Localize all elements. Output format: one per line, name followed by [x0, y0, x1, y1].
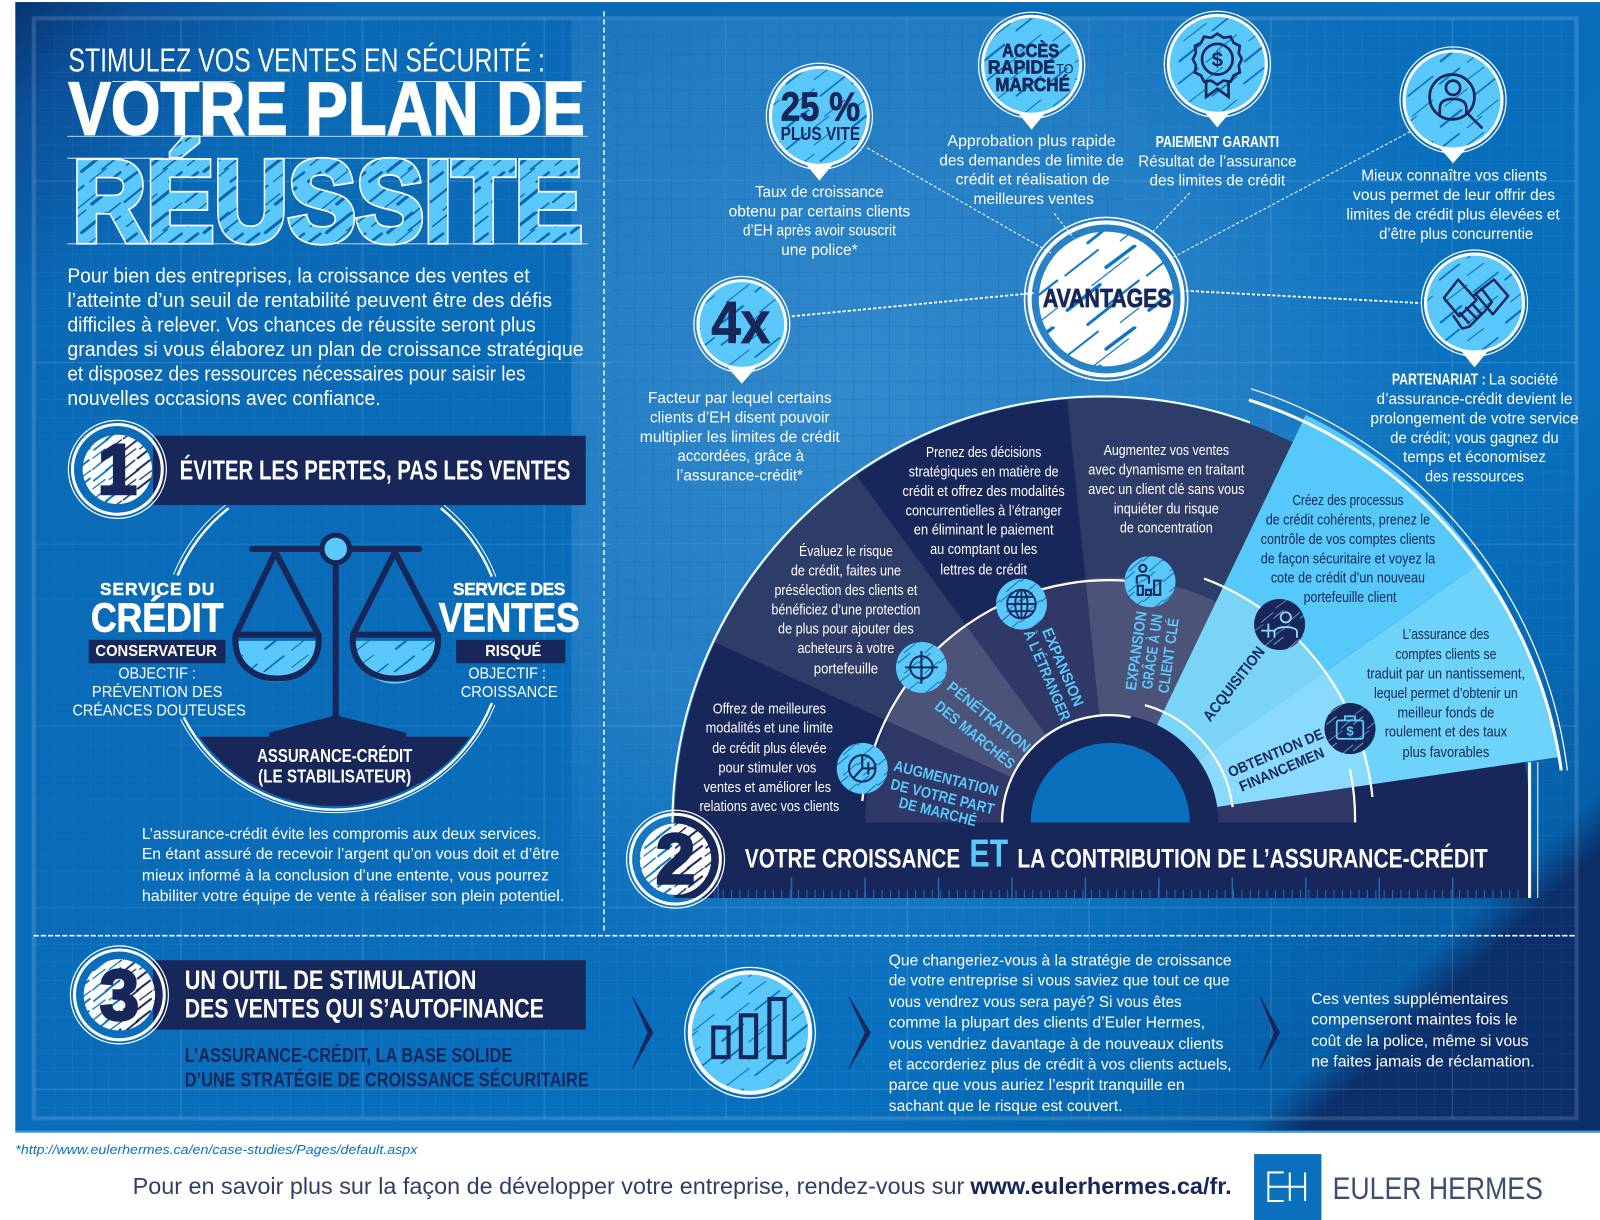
text: key client expansion: de concentration — [1120, 521, 1213, 537]
text: know your clients: limites de crédit plus élevées et — [1346, 206, 1560, 223]
arrow: chevron 3 — [1260, 997, 1280, 1068]
intro paragraph: nouvelles occasions avec confiance. — [67, 388, 381, 410]
text: foreign expansion: crédit et offrez des modalités — [903, 484, 1065, 500]
section 1 paragraph: habiliter votre équipe de vente à réaliser son plein potentiel. — [142, 888, 564, 905]
section 3 number badge: 3 — [100, 955, 139, 1035]
text: partnership: temps et économisez — [1403, 449, 1546, 466]
text: partnership: de crédit; vous gagnez du — [1390, 430, 1559, 447]
title: RÉUSSITE — [72, 138, 583, 266]
intro paragraph: l’atteinte d’un seuil de rentabilité peuvent être des défis — [67, 290, 552, 312]
icon: target — [896, 642, 947, 693]
text: acquisition: Créez des processus — [1292, 493, 1404, 509]
credit department label: CRÉANCES DOUTEUSES — [72, 700, 246, 719]
section 1 heading bar — [153, 436, 586, 505]
label: key client expansion: EXPANSION — [1123, 610, 1151, 691]
dome base and title bar — [674, 398, 1530, 898]
pin: know your clients — [1400, 47, 1506, 163]
text: know your clients: Mieux connaître vos clients — [1361, 168, 1547, 185]
text: multiplier: Facteur par lequel certains — [648, 390, 832, 407]
text: fast approval: Approbation plus rapide — [947, 133, 1116, 150]
section 3 paragraph — [889, 952, 1232, 1115]
section 3 paragraph: parce que vous auriez l’esprit tranquille en — [889, 1077, 1185, 1094]
label: key client expansion — [1123, 610, 1183, 694]
title: RÉUSSITE — [72, 138, 583, 266]
pin: paiement garanti medal: $ — [1212, 49, 1224, 71]
logo: Euler Hermes: EULER HERMES — [1333, 1170, 1543, 1206]
text: financing: roulement et des taux — [1385, 725, 1508, 741]
text: growth rate: Taux de croissance — [755, 184, 884, 201]
balance diagram — [72, 505, 580, 816]
text: foreign expansion — [903, 445, 1065, 578]
credit department label: CRÉDIT — [91, 595, 224, 641]
benefits hub: avantages — [1024, 217, 1188, 381]
title — [67, 42, 588, 266]
section 3 number badge — [70, 946, 168, 1044]
section 3 paragraph: vous vendrez vous sera payé? Si vous êtes — [889, 994, 1182, 1011]
stabiliser base — [200, 716, 470, 806]
label: financing: FINANCEMEN — [1237, 745, 1327, 796]
call to action: Pour en savoir plus sur la façon de développer votre entreprise, rendez-vous sur — [133, 1173, 965, 1199]
section 3 paragraph: comme la plupart des clients d’Euler Hermes, — [889, 1015, 1205, 1032]
intro paragraph: Pour bien des entreprises, la croissance des ventes et — [67, 266, 530, 288]
label: market share growth: DE MARCHÉ — [897, 795, 978, 830]
pin: 4x: 4x — [711, 289, 770, 356]
text: market penetration: Évaluez le risque — [799, 543, 893, 560]
icon: pie chart — [837, 743, 888, 794]
sales department label: CROISSANCE — [461, 684, 558, 701]
section 1 paragraph — [142, 826, 564, 905]
text: multiplier: multiplier les limites de crédit — [640, 429, 840, 446]
text: guaranteed payment: PAIEMENT GARANTI — [1156, 134, 1279, 151]
section 1 heading bar: ÉVITER LES PERTES, PAS LES VENTES — [180, 455, 570, 486]
text: market penetration: bénéficiez d’une protection — [771, 602, 920, 618]
text: key client expansion: avec un client clé sans vous — [1088, 482, 1244, 498]
sales department label — [439, 579, 580, 701]
central semicircle — [1002, 714, 1218, 822]
text: partnership — [1370, 372, 1579, 486]
label: market share growth: DE VOTRE PART — [889, 776, 996, 818]
section 3 subtitle: D’UNE STRATÉGIE DE CROISSANCE SÉCURITAIRE — [185, 1069, 589, 1092]
text: financing: L’assurance des — [1403, 627, 1489, 643]
section 1 paragraph: L’assurance-crédit évite les compromis aux deux services. — [142, 826, 541, 843]
outer sectors — [715, 398, 1292, 721]
text: market share: relations avec vos clients — [699, 799, 839, 815]
intro paragraph: et disposez des ressources nécessaires pour saisir les — [67, 364, 526, 386]
label: key client expansion: GRÂCE À UN — [1138, 613, 1167, 690]
section 3 paragraph: et accorderiez plus de crédit à vos clients actuels, — [889, 1056, 1232, 1073]
intro paragraph — [67, 266, 584, 410]
section 2 title: VOTRE CROISSANCE — [745, 843, 960, 873]
closing paragraph: ne faites jamais de réclamation. — [1311, 1053, 1535, 1070]
text: guaranteed payment: Résultat de l’assurance — [1138, 153, 1297, 170]
credit department label: SERVICE DU — [100, 579, 214, 599]
stabiliser label: ASSURANCE-CRÉDIT — [257, 745, 413, 766]
dome arcs — [672, 389, 1567, 898]
section 2 title — [745, 832, 1488, 875]
text: foreign expansion: en éliminant le paiement — [914, 523, 1054, 539]
growth dome chart — [671, 388, 1568, 898]
credit department label: OBJECTIF : — [118, 666, 196, 683]
title: VOTRE PLAN DE — [68, 68, 585, 152]
text: acquisition: portefeuille client — [1304, 590, 1396, 606]
text: growth rate: obtenu par certains clients — [729, 203, 910, 220]
pin: accès rapide au marché — [979, 12, 1085, 130]
label: market penetration: PÉNÉTRATION — [943, 679, 1033, 756]
text: market share: modalités et une limite — [706, 721, 833, 737]
label: key client expansion: CLIENT CLÉ — [1155, 617, 1183, 694]
section 1 number badge: 1 — [97, 430, 137, 510]
text: financing: comptes clients se — [1395, 647, 1496, 663]
text: acquisition: de crédit cohérents, prenez le — [1266, 512, 1430, 528]
section 3 subtitle — [185, 1044, 589, 1092]
intro paragraph: difficiles à relever. Vos chances de réussite seront plus — [67, 315, 536, 337]
ruler ticks — [714, 888, 1524, 894]
closing paragraph: Ces ventes supplémentaires — [1311, 991, 1508, 1008]
section 1 number badge — [68, 420, 166, 518]
label: market share growth: AUGMENTATION — [892, 758, 1000, 800]
title: STIMULEZ VOS VENTES EN SÉCURITÉ : — [68, 42, 545, 79]
section 1 paragraph: En étant assuré de recevoir l’argent qu’on vous doit et d’être — [142, 846, 559, 863]
text: growth rate: d’EH après avoir souscrit — [743, 223, 896, 240]
label: foreign expansion: EXPANSION — [1038, 626, 1086, 709]
section 3 paragraph: Que changeriez-vous à la stratégie de croissance — [889, 952, 1232, 969]
dashed dividers — [34, 11, 1577, 936]
text: partnership: d’assurance-crédit devient le — [1377, 391, 1573, 408]
text: key client expansion — [1088, 443, 1244, 537]
text: partnership: prolongement de votre service — [1370, 410, 1579, 427]
sales department label: OBJECTIF : — [468, 666, 546, 683]
text: market share: Offrez de meilleures — [713, 701, 826, 717]
text: acquisition: cote de crédit d’un nouveau — [1271, 571, 1425, 587]
sales department label: SERVICE DES — [453, 579, 565, 599]
label: acquisition: ACQUISITION — [1200, 644, 1269, 725]
section 1 paragraph: mieux informé à la conclusion d’une entente, vous pourrez — [142, 868, 549, 885]
arrow: chevron 1 — [633, 997, 653, 1068]
label: foreign expansion: À L’ÉTRANGER — [1020, 628, 1073, 723]
section 3 paragraph: de votre entreprise si vous saviez que tout ce que — [889, 973, 1230, 990]
credit department label: CONSERVATEUR — [95, 643, 217, 660]
scale icon — [235, 535, 438, 719]
text: financing — [1367, 627, 1525, 761]
pin: 25 percent — [766, 63, 872, 181]
footnote: *http://www.eulerhermes.ca/en/case-studies/Pages/default.aspx — [15, 1142, 419, 1157]
pin: paiement garanti medal — [1164, 11, 1270, 128]
closing paragraph: compenseront maintes fois le — [1311, 1011, 1518, 1028]
closing paragraph — [1311, 991, 1535, 1070]
benefits hub: avantages: AVANTAGES — [1043, 285, 1171, 313]
icon: client chart — [1124, 556, 1176, 607]
pin: accès rapide au marché: ACCÈS — [1002, 40, 1059, 61]
text: know your clients: d’être plus concurrentie — [1379, 226, 1533, 243]
icon: add client — [1254, 599, 1305, 650]
text: acquisition: contrôle de vos comptes clients — [1261, 532, 1435, 548]
section 3 paragraph: vous vendriez davantage à de nouveaux clients — [889, 1036, 1224, 1053]
label: market penetration: DES MARCHÉS — [931, 698, 1018, 773]
section 2 number badge — [627, 810, 724, 908]
pin: 4x — [694, 277, 790, 384]
text: market penetration — [771, 543, 920, 677]
sales department label: RISQUÉ — [485, 643, 541, 660]
text: financing: meilleur fonds de — [1397, 705, 1494, 721]
text: growth rate — [729, 184, 910, 259]
credit department label: PRÉVENTION DES — [92, 682, 222, 701]
section 3 heading bar — [153, 960, 586, 1030]
text: foreign expansion: au comptant ou les — [930, 542, 1037, 558]
text: market share: de crédit plus élevée — [712, 741, 827, 757]
text: acquisition — [1261, 493, 1436, 606]
pin: accès rapide au marché: MARCHÉ — [995, 74, 1070, 95]
text: financing: plus favorables — [1403, 745, 1489, 761]
text: fast approval — [939, 133, 1124, 208]
text: partnership: La société — [1489, 372, 1558, 389]
section 2 title: ET — [969, 832, 1008, 875]
pin: 25 percent: 25 % — [781, 83, 860, 129]
text: market penetration: de plus pour ajouter des — [778, 622, 914, 638]
label: financing: OBTENTION DE — [1226, 727, 1326, 781]
text: market penetration: portefeuille — [814, 661, 878, 677]
arrow: chevron 2 — [849, 997, 870, 1068]
pin: 25 percent: PLUS VITE — [781, 123, 860, 144]
text: fast approval: des demandes de limite de — [939, 152, 1124, 169]
closing paragraph: coût de la police, même si vous — [1311, 1033, 1529, 1050]
text: key client expansion: avec dynamisme en traitant — [1088, 462, 1244, 478]
text: market penetration: présélection des clients et — [774, 583, 917, 599]
text: multiplier — [640, 390, 840, 485]
text: foreign expansion: stratégiques en matière de — [909, 465, 1059, 481]
text: key client expansion: Augmentez vos ventes — [1104, 443, 1229, 459]
section 3 heading bar: DES VENTES QUI S’AUTOFINANCE — [185, 993, 544, 1023]
credit department label — [72, 579, 246, 719]
text: guaranteed payment — [1138, 134, 1297, 190]
text: know your clients — [1346, 168, 1560, 243]
text: know your clients: vous permet de leur offrir des — [1353, 187, 1555, 204]
text: foreign expansion: lettres de crédit — [940, 562, 1027, 578]
inner band sectors — [866, 578, 1354, 822]
icon: briefcase dollar — [1324, 703, 1376, 754]
section 2 number badge: 2 — [656, 820, 695, 900]
text: market share: ventes et améliorer les — [704, 780, 831, 796]
stabiliser label: (LE STABILISATEUR) — [258, 766, 411, 787]
benefit connector lines — [792, 132, 1420, 316]
pin: accès rapide au marché: TO — [1056, 61, 1073, 77]
icon: briefcase dollar: $ — [1346, 724, 1354, 739]
call to action: www.eulerhermes.ca/fr. — [969, 1173, 1232, 1199]
text: multiplier: l’assurance-crédit* — [677, 468, 803, 485]
intro paragraph: grandes si vous élaborez un plan de croissance stratégique — [67, 339, 584, 361]
text: market share: pour stimuler vos — [718, 760, 816, 776]
light sectors — [1157, 415, 1558, 807]
pin: accès rapide au marché: RAPIDE — [988, 56, 1055, 77]
text: foreign expansion: concurrentielles à l’étranger — [906, 503, 1062, 519]
sales department label: VENTES — [439, 595, 580, 641]
section 2 title: LA CONTRIBUTION DE L’ASSURANCE-CRÉDIT — [1017, 843, 1488, 873]
text: partnership: des ressources — [1425, 469, 1524, 486]
ring around scale — [173, 505, 496, 813]
icon: growth bars — [685, 967, 815, 1098]
logo: Euler Hermes — [1254, 1154, 1543, 1220]
text: fast approval: meilleures ventes — [973, 191, 1094, 208]
text: foreign expansion: Prenez des décisions — [926, 445, 1041, 461]
text: market share — [699, 701, 839, 815]
text: fast approval: crédit et réalisation de — [956, 172, 1110, 189]
icon: globe — [996, 579, 1047, 630]
text: financing: lequel permet d’obtenir un — [1374, 686, 1518, 702]
text: financing: traduit par un nantissement, — [1367, 667, 1525, 683]
text: growth rate: une police* — [781, 242, 858, 259]
section 3 subtitle: L’ASSURANCE-CRÉDIT, LA BASE SOLIDE — [185, 1044, 512, 1067]
pin: partnership handshake — [1421, 250, 1528, 367]
section 3 paragraph: sachant que le risque est couvert. — [889, 1098, 1122, 1115]
text: guaranteed payment: des limites de crédit — [1149, 173, 1286, 190]
label: market share growth — [889, 758, 1000, 830]
section 3 heading bar: UN OUTIL DE STIMULATION — [185, 965, 477, 995]
text: acquisition: de façon sécuritaire et voyez la — [1261, 551, 1436, 567]
stabiliser label — [257, 745, 413, 787]
text: multiplier: accordées, grâce à — [678, 448, 804, 465]
text: partnership: PARTENARIAT : — [1392, 372, 1486, 389]
text: market penetration: acheteurs à votre — [797, 641, 894, 657]
text: key client expansion: inquiéter du risque — [1114, 501, 1219, 517]
text: multiplier: clients d’EH disent pouvoir — [650, 409, 830, 426]
text: market penetration: de crédit, faites une — [791, 564, 901, 580]
